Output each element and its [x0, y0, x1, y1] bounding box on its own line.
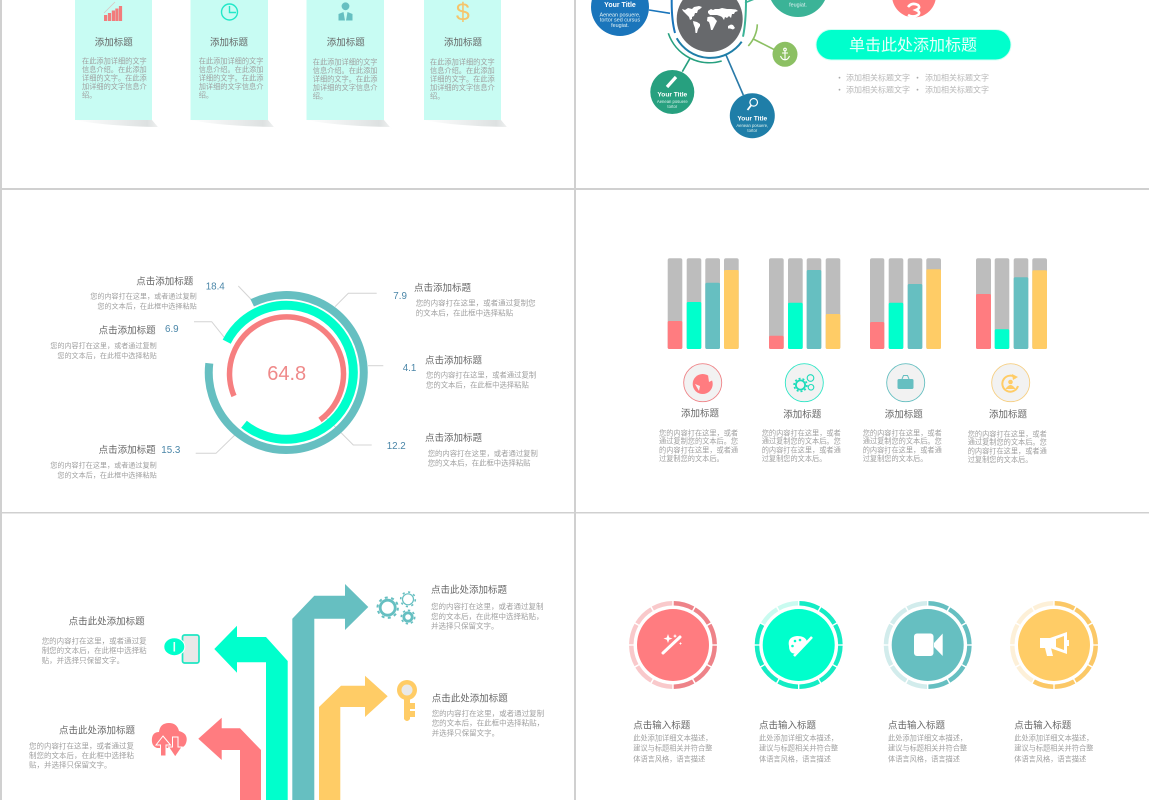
text: item 4: 此处添加详细文本描述，: [1014, 733, 1093, 742]
node: blue: [591, 0, 649, 36]
text: column 3: [863, 409, 942, 463]
node: blue: feugiat.: [611, 23, 629, 29]
node: search: Your Title: [737, 115, 768, 122]
icon: rising bar chart: [104, 2, 122, 21]
text: lower left: 点击此处添加标题: [59, 725, 135, 737]
panel: direction arrows: [29, 584, 544, 800]
text: lower right: 您的文本后，在此框中选择粘贴，: [432, 718, 544, 728]
text: column 4: [968, 409, 1047, 464]
bar chart 3: [870, 258, 941, 349]
arrow: teal right: [292, 584, 368, 800]
ring: teal outer: [209, 295, 364, 450]
icon: gears badge: [785, 364, 823, 402]
text: item 1: 点击输入标题: [633, 720, 691, 732]
label: 12.2: 您的内容打在这里，或者通过复制: [428, 449, 538, 458]
label: 12.2: 点击添加标题: [425, 432, 483, 444]
label: 6.9: 点击添加标题: [99, 325, 156, 337]
card 2: 添加标题: [210, 37, 248, 49]
card 2: 在此添加详细的文字: [199, 56, 263, 65]
card 1: 详细的文字。在此添: [82, 73, 147, 82]
node: blue: tortor sed cursus: [600, 18, 640, 24]
node: search: [730, 93, 775, 138]
card 1: [75, 0, 160, 130]
text: column 3: 过复制您的文本后。: [863, 454, 927, 463]
text: lower right: [432, 692, 544, 738]
text: item 4: 点击输入标题: [1014, 720, 1072, 732]
arrow: mint left: [214, 626, 288, 800]
panel: four info cards: [75, 0, 509, 130]
label: 4.1: 4.1: [403, 363, 416, 374]
label: 4.1: [403, 355, 536, 390]
panel: world hub diagram: [591, 0, 1011, 138]
label: 18.4: 您的内容打在这里，或者通过复制: [90, 292, 197, 301]
ring: red inner: [230, 317, 344, 420]
card 4: [424, 0, 509, 130]
text: column 3: 您的内容打在这里，或者: [863, 428, 942, 437]
text: item 3: 此处添加详细文本描述，: [888, 733, 967, 742]
text: upper right: 您的内容打在这里，或者通过复制: [431, 601, 544, 611]
circle: palette icon: [763, 609, 835, 681]
circle: video icon: [892, 609, 964, 681]
card 1: 绍。: [82, 91, 96, 100]
card 2: 详细的文字。在此添: [199, 73, 263, 82]
node: anchor: [772, 42, 798, 67]
title pill: 单击此处添加标题: [849, 36, 977, 54]
panel: bar groups: [659, 258, 1047, 464]
text: column 3: 的内容打在这里，或者通: [863, 446, 942, 455]
text: column 2: 通过复制您的文本后。您: [762, 437, 841, 446]
text: column 2: [762, 409, 841, 463]
text: upper right: [431, 584, 544, 631]
leader lines: [194, 286, 383, 453]
node: pencil: Your Title: [657, 91, 688, 98]
text: column 1: [659, 407, 738, 463]
label: 6.9: [50, 324, 179, 360]
node: top green: feugiat.: [789, 2, 807, 8]
text: column 3: 通过复制您的文本后。您: [863, 437, 942, 446]
icon: briefcase badge: [887, 364, 925, 402]
text: upper right: 您的文本后，在此框中选择粘贴，: [431, 611, 544, 621]
card 4: 信息介绍。在此添加: [430, 66, 495, 75]
label: 18.4: [90, 275, 225, 311]
text: lower right: 并选择只保留文字。: [432, 728, 499, 738]
text: item 1: 体语言风格，语言描述: [633, 755, 705, 764]
card 3: [306, 0, 392, 130]
label: 12.2: 12.2: [387, 441, 406, 452]
text: item 1: [633, 720, 712, 764]
label: 15.3: 您的文本后，在此框中选择粘贴: [57, 471, 157, 480]
text: lower left: [29, 725, 135, 770]
text: column 1: 的内容打在这里，或者通: [659, 446, 738, 455]
text: item 2: [759, 720, 838, 764]
card 4: 在此添加详细的文字: [430, 57, 495, 66]
icon: magnifier: [748, 98, 758, 110]
node: pencil: tortor: [667, 104, 678, 109]
bullet list: [839, 73, 989, 95]
text: item 3: [888, 720, 967, 764]
icon: business person: [338, 2, 352, 21]
icon: refresh person badge: [992, 364, 1030, 402]
label: 4.1: 您的内容打在这里，或者通过复制: [426, 371, 536, 380]
text: upper right: 点击此处添加标题: [431, 584, 508, 596]
text: upper left: 您的内容打在这里，或者通过复: [42, 635, 147, 645]
label: 15.3: [50, 444, 181, 480]
progress ring: yellow: [1012, 603, 1096, 687]
card 4: 添加标题: [444, 37, 482, 49]
text: upper left: [42, 616, 147, 665]
text: lower left: 制您的文本后，在此框中选择粘: [29, 750, 134, 760]
text: upper right: 并选择只保留文字。: [431, 621, 498, 631]
bar chart 2: [769, 258, 840, 349]
card 3: 详细的文字。在此添: [313, 74, 378, 83]
text: column 4: 通过复制您的文本后。您: [968, 438, 1047, 447]
label: 7.9: 的文本后，在此框中选择粘贴: [416, 307, 514, 317]
circle: megaphone icon: [1018, 609, 1090, 681]
text: item 4: [1014, 720, 1093, 764]
bullet list: 添加相关标题文字: [925, 85, 989, 95]
card 2: [190, 0, 276, 130]
bullet list: 添加相关标题文字: [925, 73, 989, 83]
card 3: 加详细的文字信息介: [313, 83, 378, 92]
text: item 2: 点击输入标题: [759, 720, 817, 732]
text: column 4: 您的内容打在这里，或者: [968, 429, 1047, 438]
card 1: 在此添加详细的文字: [82, 56, 147, 65]
ring arcs: [668, 0, 746, 63]
panel: concentric ring chart: [50, 275, 538, 480]
bar chart 1: [668, 258, 739, 349]
center value: 64.8: [267, 363, 306, 385]
card 1: 加详细的文字信息介: [82, 82, 148, 91]
text: item 1: 建议与标题相关并符合整: [633, 744, 712, 753]
label: 12.2: 您的文本后，在此框中选择粘贴: [428, 459, 531, 468]
connector lines: [649, 0, 775, 95]
label: 15.3: 您的内容打在这里，或者通过复制: [50, 461, 157, 470]
icon: world map: [682, 6, 738, 33]
label: 6.9: 您的文本后，在此框中选择粘贴: [57, 351, 157, 360]
progress ring: teal: [886, 603, 969, 687]
text: column 4: 添加标题: [989, 409, 1027, 421]
card 1: 信息介绍。在此添加: [82, 65, 147, 74]
progress ring: mint: [757, 603, 840, 687]
label: 7.9: 7.9: [393, 291, 407, 302]
text: item 4: 建议与标题相关并符合整: [1014, 744, 1093, 753]
ring: mint middle: [227, 305, 353, 439]
text: upper left: 贴，并选择只保留文字。: [42, 655, 124, 665]
bullet list: 添加相关标题文字: [846, 73, 910, 83]
arrow: red left: [198, 718, 261, 800]
text: column 1: 您的内容打在这里，或者: [659, 428, 738, 437]
text: item 3: 建议与标题相关并符合整: [888, 744, 967, 753]
icon: gears: [378, 592, 415, 624]
card 2: 加详细的文字信息介: [199, 82, 264, 91]
card 4: 绍。: [430, 92, 444, 101]
text: column 2: 的内容打在这里，或者通: [762, 446, 841, 455]
card 3: 添加标题: [327, 37, 365, 49]
node: search: Aenean posuere,: [736, 123, 768, 128]
label: 15.3: 点击添加标题: [99, 444, 156, 456]
node: search: tortor: [747, 128, 758, 133]
label: 4.1: 您的文本后，在此框中选择粘贴: [426, 381, 529, 390]
node: blue: Aenean posuere,: [599, 12, 641, 18]
card 2: 绍。: [199, 91, 213, 100]
text: item 2: 建议与标题相关并符合整: [759, 744, 838, 753]
text: upper left: 制您的文本后，在此框中选择粘: [42, 645, 147, 655]
icon: key: [397, 680, 417, 721]
card 4: 加详细的文字信息介: [430, 83, 496, 92]
icon: cloud up down: [152, 723, 187, 757]
badge: red number: [892, 0, 936, 18]
label: 18.4: 18.4: [206, 282, 225, 292]
label: 4.1: 点击添加标题: [425, 355, 483, 367]
text: lower left: 您的内容打在这里，或者通过复: [29, 740, 134, 750]
text: column 2: 过复制您的文本后。: [762, 454, 826, 463]
card 3: 绍。: [313, 92, 327, 101]
icon: globe badge: [684, 364, 722, 402]
label: 7.9: [393, 282, 536, 317]
card 4: 详细的文字。在此添: [430, 74, 495, 83]
text: column 2: 添加标题: [783, 409, 822, 421]
arrow: yellow right: [319, 676, 388, 800]
text: item 2: 体语言风格，语言描述: [759, 755, 831, 764]
card 3: 在此添加详细的文字: [313, 57, 378, 66]
text: lower left: 贴，并选择只保留文字。: [29, 760, 112, 770]
label: 6.9: 您的内容打在这里，或者通过复制: [50, 341, 157, 350]
label: 7.9: 您的内容打在这里，或者通过复制您: [416, 297, 536, 307]
panel: progress circles: [631, 603, 1096, 764]
icon: phone with bubble: [164, 635, 199, 663]
text: upper left: 点击此处添加标题: [69, 616, 145, 628]
bar chart 4: [976, 258, 1047, 349]
text: lower right: 点击此处添加标题: [432, 692, 508, 704]
icon: pencil: [667, 77, 676, 87]
label: 7.9: 点击添加标题: [414, 282, 472, 294]
text: item 1: 此处添加详细文本描述，: [633, 733, 712, 742]
text: item 2: 此处添加详细文本描述，: [759, 733, 838, 742]
text: item 3: 体语言风格，语言描述: [888, 755, 960, 764]
icon: clock: [222, 4, 238, 20]
card 3: 信息介绍。在此添加: [313, 66, 378, 75]
node: pencil: [650, 70, 694, 114]
label: 12.2: [387, 432, 538, 468]
node: top green: [768, 0, 828, 17]
node: blue: Your Title: [604, 2, 636, 9]
label: 18.4: 您的文本后，在此框中选择粘贴: [97, 302, 197, 311]
text: column 1: 添加标题: [681, 407, 719, 419]
label: 6.9: 6.9: [165, 324, 179, 335]
text: column 4: 过复制您的文本后。: [968, 455, 1032, 464]
text: column 1: 过复制您的文本后。: [659, 454, 724, 463]
text: column 2: 您的内容打在这里，或者: [762, 428, 841, 437]
icon: anchor: [780, 48, 790, 60]
progress ring: red: [631, 603, 715, 687]
text: lower right: 您的内容打在这里，或者通过复制: [432, 708, 544, 718]
card 1: 添加标题: [95, 37, 133, 49]
text: column 4: 的内容打在这里，或者通: [968, 447, 1047, 456]
title pill: [816, 30, 1011, 60]
text: item 3: 点击输入标题: [888, 720, 946, 732]
text: column 1: 通过复制您的文本后。您: [659, 437, 738, 446]
card 2: 信息介绍。在此添加: [199, 65, 263, 74]
circle: wand icon: [637, 609, 709, 681]
central globe: [677, 0, 743, 52]
bullet list: 添加相关标题文字: [846, 85, 910, 95]
text: item 4: 体语言风格，语言描述: [1014, 755, 1086, 764]
label: 18.4: 点击添加标题: [136, 275, 194, 287]
text: column 3: 添加标题: [885, 409, 923, 421]
node: pencil: Aenean posuere: [657, 99, 688, 104]
label: 15.3: 15.3: [161, 445, 181, 456]
